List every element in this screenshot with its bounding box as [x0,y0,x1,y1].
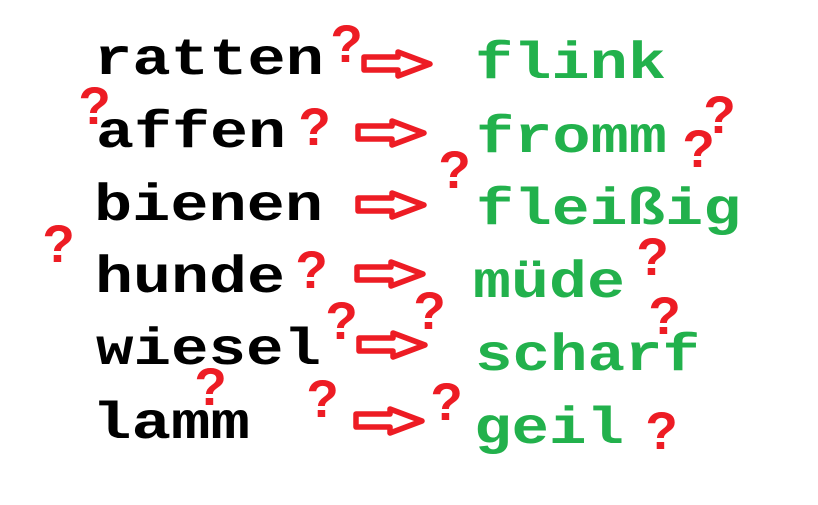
question mark 8: ? [295,241,328,300]
word: hunde: hunde [95,249,285,308]
scattered question marks [42,15,736,461]
question mark 11: ? [413,282,446,341]
word: bienen: bienen [94,177,323,236]
question mark 2: ? [78,77,111,136]
word: affen: affen [96,104,286,163]
question mark 14: ? [306,370,339,429]
question mark 13: ? [194,358,227,417]
arrow: ratten to flink [364,52,430,76]
question mark 16: ? [645,402,678,461]
question mark 9: ? [636,228,669,287]
word: fleißig: fleißig [476,181,741,240]
word: scharf: scharf [475,327,700,386]
adjective word column [473,35,741,459]
word: flink: flink [475,35,666,94]
question mark 4: ? [703,86,736,145]
question mark 6: ? [438,141,471,200]
question mark 7: ? [42,215,75,274]
question mark 5: ? [682,120,715,179]
animal word column [92,31,324,454]
arrow: hunde to müde [357,262,423,286]
arrow column [356,52,430,433]
word: wiesel: wiesel [96,321,321,380]
arrow: bienen to fleißig [358,193,424,217]
word: fromm: fromm [476,109,667,168]
question mark 3: ? [298,98,331,157]
question mark 10: ? [325,292,358,351]
word: ratten: ratten [94,31,324,90]
word: lamm: lamm [92,395,250,454]
arrow: affen to fromm [358,121,424,145]
arrow: lamm to geil [356,409,422,433]
word: geil: geil [474,400,624,459]
arrow: wiesel to scharf [359,333,425,357]
question mark 15: ? [430,373,463,432]
word: müde: müde [473,254,625,313]
question mark 1: ? [330,15,363,74]
question mark 12: ? [648,287,681,346]
